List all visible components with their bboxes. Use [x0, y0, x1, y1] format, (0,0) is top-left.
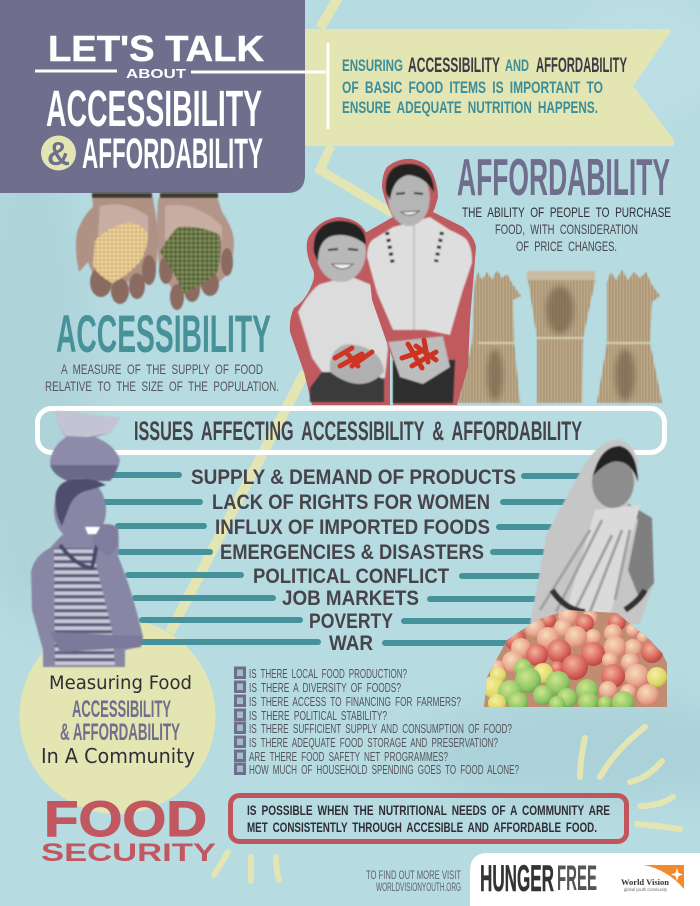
food security statement box — [230, 796, 626, 842]
title heading — [35, 28, 328, 178]
accessibility description: A MEASURE OF THE SUPPLY OF FOOD — [61, 361, 263, 377]
accessibility description: RELATIVE TO THE SIZE OF THE POPULATION. — [45, 378, 279, 394]
banner text: ACCESSIBILITY — [408, 54, 500, 77]
title panel — [0, 0, 328, 193]
yellow diagonal ray behind photos — [170, 372, 305, 632]
checklist: ARE THERE FOOD SAFETY NET PROGRAMMES? — [249, 749, 448, 764]
chillies in child's hands — [335, 348, 372, 366]
measuring food community label: Measuring Food — [49, 672, 192, 694]
photo: child with chillies — [290, 217, 390, 405]
checklist: HOW MUCH OF HOUSEHOLD SPENDING GOES TO FOOD ALONE? — [249, 762, 519, 777]
issue list: POVERTY — [309, 610, 393, 633]
photo: pile of apples — [484, 610, 667, 707]
issue list: SUPPLY & DEMAND OF PRODUCTS — [191, 466, 516, 489]
photo: woman carrying bag on head — [31, 411, 143, 667]
checklist: IS THERE LOCAL FOOD PRODUCTION? — [249, 666, 407, 681]
measuring food community label: ACCESSIBILITY — [72, 696, 171, 723]
checkboxes — [236, 668, 244, 774]
accessibility description — [45, 361, 279, 394]
photo: three straw bundles — [458, 270, 662, 403]
logo: world vision — [621, 865, 684, 892]
logo panel — [470, 853, 700, 906]
title heading: AFFORDABILITY — [82, 130, 263, 178]
heading: food security — [41, 791, 216, 867]
heading: food security: SECURITY — [41, 839, 216, 867]
issue list: EMERGENCIES & DISASTERS — [220, 541, 484, 564]
issue list: JOB MARKETS — [282, 587, 419, 610]
photo: hands holding seeds — [76, 193, 234, 310]
yellow circle: measuring food background — [20, 618, 216, 814]
issue list: INFLUX OF IMPORTED FOODS — [215, 516, 490, 539]
find out more text: WORLDVISIONYOUTH.ORG — [376, 880, 461, 894]
checklist: IS THERE ACCESS TO FINANCING FOR FARMERS? — [249, 694, 461, 709]
banner text — [342, 54, 627, 117]
yellow sun rays near food security — [214, 727, 680, 881]
logo: world vision: World Vision — [621, 877, 669, 887]
heading: food security: FOOD — [44, 791, 207, 847]
chillies in woman's hands — [402, 340, 436, 368]
issue list: WAR — [329, 632, 373, 655]
checklist: IS THERE ADEQUATE FOOD STORAGE AND PRESERVATION? — [249, 735, 498, 750]
find out more text — [366, 868, 461, 894]
affordability description — [462, 204, 671, 254]
logo panel: FREE — [557, 859, 597, 898]
issues heading box — [38, 408, 664, 452]
photo: woman in sari — [400, 0, 654, 624]
issue connector bars — [105, 475, 590, 643]
right hand fingers — [159, 248, 233, 310]
photo: woman with chillies — [365, 159, 476, 405]
find out more text: TO FIND OUT MORE VISIT — [366, 868, 461, 882]
title heading: ACCESSIBILITY — [46, 80, 262, 137]
checklist: IS THERE POLITICAL STABILITY? — [249, 708, 387, 723]
logo: world vision: global youth community — [624, 887, 668, 892]
measuring food community label: In A Community — [41, 744, 195, 768]
issue list — [191, 466, 516, 655]
issue list: POLITICAL CONFLICT — [253, 565, 449, 588]
checklist: IS THERE A DIVERSITY OF FOODS? — [249, 680, 401, 695]
banner text: OF BASIC FOOD ITEMS IS IMPORTANT TO — [342, 78, 603, 97]
heading: accessibility: ACCESSIBILITY — [56, 305, 271, 364]
yellow ribbon banner with rays — [300, 0, 674, 213]
measuring food community label: & AFFORDABILITY — [60, 719, 180, 746]
left hand fingers — [90, 255, 156, 304]
banner text: ENSURING — [342, 56, 403, 75]
title heading: ABOUT — [126, 66, 186, 81]
checklist — [236, 666, 519, 777]
issue list: LACK OF RIGHTS FOR WOMEN — [212, 491, 490, 514]
title heading: LET'S TALK — [48, 28, 264, 69]
measuring food community label — [41, 672, 195, 768]
banner text: AND — [505, 56, 529, 75]
title heading: & — [47, 135, 70, 172]
logo: hunger free: HUNGER — [480, 858, 554, 899]
checklist: IS THERE SUFFICIENT SUPPLY AND CONSUMPTION OF FOOD? — [249, 721, 512, 736]
affordability description: OF PRICE CHANGES. — [516, 238, 617, 254]
